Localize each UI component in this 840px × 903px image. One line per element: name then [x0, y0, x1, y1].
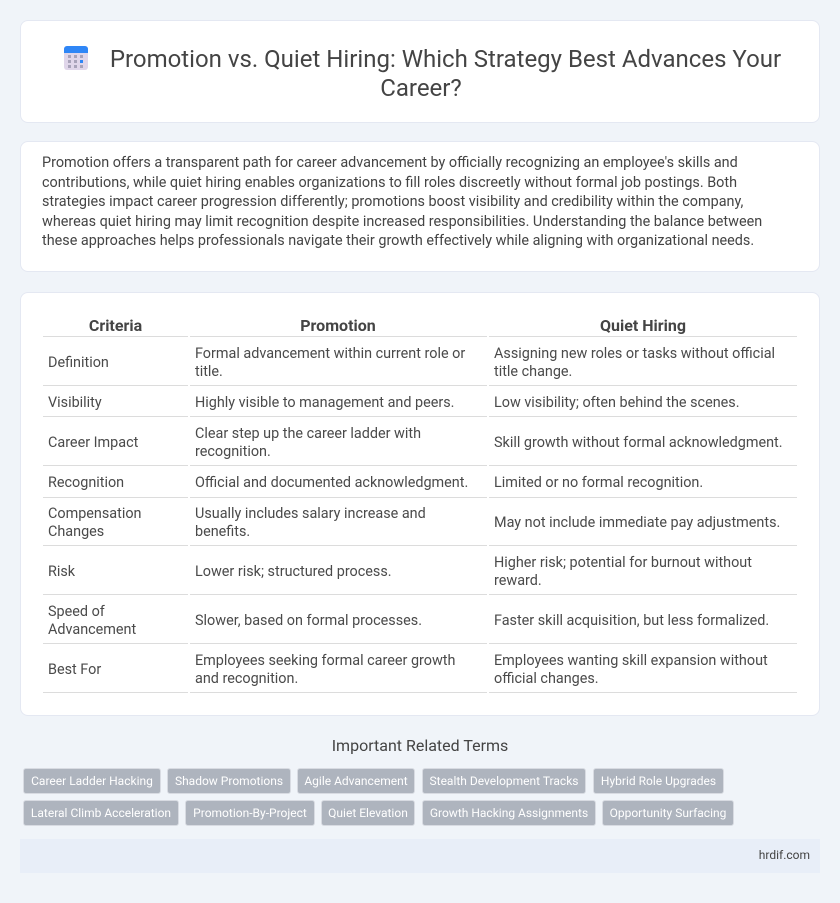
- tag: Quiet Elevation: [328, 806, 408, 820]
- tag: [321, 800, 415, 826]
- row: Speed of Advancement: Speed of: [48, 603, 105, 620]
- row: Best For: and recognition.: [195, 670, 298, 687]
- row: Career Impact: Career Impact: [48, 434, 138, 451]
- row: Speed of Advancement: Advancement: [48, 621, 136, 638]
- row: Definition: title.: [195, 363, 223, 380]
- tag: Promotion-By-Project: [193, 806, 307, 820]
- row: Visibility: Visibility: [48, 394, 102, 411]
- row: Career Impact: Clear step up the career ladder with: [195, 425, 421, 442]
- footer source: hrdif.com: [759, 848, 810, 862]
- heading: related terms: Important Related Terms: [332, 736, 508, 755]
- panel: title header: [20, 20, 820, 123]
- row: Best For: Best For: [48, 661, 101, 678]
- tag: [593, 768, 724, 794]
- intro text: contributions, while quiet hiring enables organizations to fill roles discreetly without formal job postings. Both: [42, 174, 737, 191]
- row: Career Impact: [48, 425, 783, 460]
- row: Risk: Higher risk; potential for burnout without: [494, 554, 752, 571]
- row: Risk: Lower risk; structured process.: [195, 563, 392, 580]
- row: Definition: title change.: [494, 363, 572, 380]
- tag: Shadow Promotions: [175, 774, 283, 788]
- tag: [422, 800, 596, 826]
- row: Visibility: Low visibility; often behind the scenes.: [494, 394, 740, 411]
- tag: [23, 768, 161, 794]
- intro text: whereas quiet hiring may limit recognition despite increased responsibilities. Understanding the balance between: [42, 213, 762, 230]
- intro text: [42, 154, 762, 249]
- tag: [185, 800, 315, 826]
- intro text: strategies impact career progression differently; promotions boost visibility and credibility within the company,: [42, 193, 743, 210]
- tag: [167, 768, 291, 794]
- tag: [602, 800, 734, 826]
- row: Compensation Changes: Changes: [48, 523, 104, 540]
- tag: Opportunity Surfacing: [610, 806, 726, 820]
- row: Career Impact: recognition.: [195, 443, 271, 460]
- related term tags: [23, 768, 734, 826]
- row: Compensation Changes: Compensation: [48, 505, 141, 522]
- row: Recognition: [48, 474, 703, 491]
- row: Compensation Changes: May not include immediate pay adjustments.: [494, 514, 780, 531]
- table header: [89, 316, 686, 335]
- intro text: Promotion offers a transparent path for career advancement by officially recognizing an employee's skills and: [42, 154, 738, 171]
- table header: Promotion: [300, 316, 376, 335]
- row: Speed of Advancement: Faster skill acquisition, but less formalized.: [494, 612, 769, 629]
- table header: Criteria: [89, 316, 142, 335]
- row: Best For: official changes.: [494, 670, 599, 687]
- title: Promotion vs. Quiet Hiring: Which Strategy Best Advances Your: [110, 45, 781, 73]
- panel: intro paragraph: [20, 141, 820, 272]
- title: [110, 45, 781, 102]
- tag: [23, 800, 179, 826]
- row: Definition: Definition: [48, 354, 109, 371]
- row: Best For: [48, 652, 768, 687]
- row: Recognition: Limited or no formal recognition.: [494, 474, 703, 491]
- tag: Lateral Climb Acceleration: [31, 806, 171, 820]
- tag: Career Ladder Hacking: [31, 774, 153, 788]
- tag: Agile Advancement: [304, 774, 408, 788]
- tag: Stealth Development Tracks: [430, 774, 578, 788]
- row: Risk: [48, 554, 752, 589]
- row: Visibility: Highly visible to management and peers.: [195, 394, 454, 411]
- tag: Hybrid Role Upgrades: [601, 774, 716, 788]
- row: Best For: Employees seeking formal career growth: [195, 652, 455, 669]
- row: Definition: [48, 345, 775, 380]
- row: Speed of Advancement: [48, 603, 769, 638]
- row: Career Impact: Skill growth without formal acknowledgment.: [494, 434, 783, 451]
- intro text: these approaches helps professionals navigate their growth effectively while aligning with organizational needs.: [42, 232, 754, 249]
- tag: Growth Hacking Assignments: [430, 806, 588, 820]
- row: Recognition: Recognition: [48, 474, 124, 491]
- title: Career?: [380, 74, 462, 102]
- row: Compensation Changes: [48, 505, 780, 540]
- footer bar: [20, 839, 820, 873]
- row: Definition: Formal advancement within current role or: [195, 345, 465, 362]
- row: Best For: Employees wanting skill expansion without: [494, 652, 768, 669]
- row: Definition: Assigning new roles or tasks without official: [494, 345, 775, 362]
- icon: calendar: [64, 46, 88, 70]
- tag: [297, 768, 415, 794]
- panel: comparison table: [20, 292, 820, 716]
- row: Recognition: Official and documented acknowledgment.: [195, 474, 468, 491]
- row: Speed of Advancement: Slower, based on formal processes.: [195, 612, 422, 629]
- table header: Quiet Hiring: [600, 316, 686, 335]
- row: Compensation Changes: Usually includes salary increase and: [195, 505, 426, 522]
- row: Risk: reward.: [494, 572, 542, 589]
- row: Risk: Risk: [48, 563, 75, 580]
- row: Compensation Changes: benefits.: [195, 523, 250, 540]
- tag: [422, 768, 586, 794]
- row: Visibility: [48, 394, 740, 411]
